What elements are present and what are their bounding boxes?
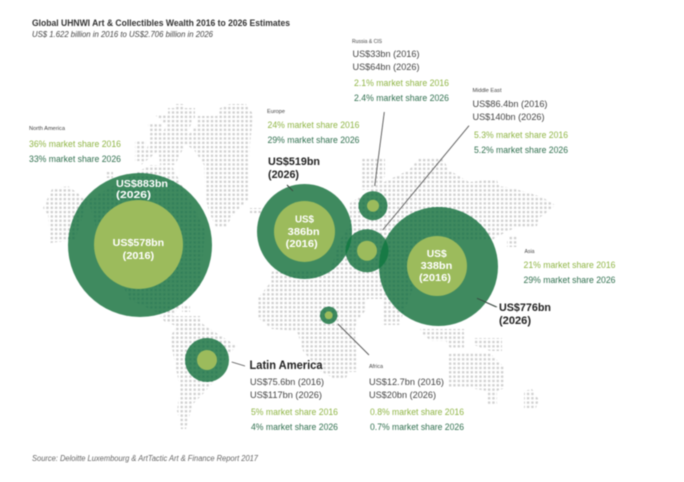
panel: Middle East: Middle East	[472, 88, 502, 94]
panel: Africa: 0.7% market share 2026	[370, 422, 464, 432]
leader lines	[232, 112, 496, 366]
panel: Middle East: US$140bn (2026)	[472, 112, 544, 122]
panel: Latin America: US$117bn (2026)	[250, 390, 322, 400]
panel: Asia: 29% market share 2026	[524, 275, 616, 285]
panel: North America: US$578bn	[113, 237, 164, 249]
panel: Russia and CIS: 2.4% market share 2026	[354, 93, 449, 103]
panel: Africa: Africa	[369, 364, 383, 370]
panel: Asia: (2026)	[499, 315, 531, 327]
panel: North America: 33% market share 2026	[29, 154, 121, 164]
panel: Europe: US$	[295, 214, 314, 226]
leader ticks over circles	[287, 185, 497, 307]
panel: Latin America: US$75.6bn (2016)	[250, 377, 324, 387]
panel: Russia and CIS	[352, 39, 449, 103]
panel: North America: US$883bn	[116, 178, 168, 190]
panel: Russia and CIS: US$64bn (2026)	[352, 62, 420, 72]
panel: Africa: US$20bn (2026)	[369, 390, 436, 400]
panel: Europe: Europe	[267, 109, 285, 115]
panel: North America: North America	[29, 126, 65, 132]
title: Global UHNWI Art & Collectibles Wealth 2016 to 2026 Estimates	[32, 18, 290, 28]
dotted world map	[43, 104, 555, 429]
panel: Europe	[267, 109, 360, 250]
panel: Asia: US$776bn	[499, 302, 551, 314]
panel: Middle East: US$86.4bn (2016)	[472, 99, 548, 109]
outer circles (2026)	[68, 173, 498, 382]
panel: Asia: (2016)	[419, 272, 451, 284]
panel: Middle East	[472, 88, 568, 155]
panel: Africa: 0.8% market share 2016	[370, 407, 464, 417]
panel: Asia: Asia	[524, 249, 535, 255]
panel: Europe: 386bn	[288, 226, 320, 238]
panel: Russia and CIS: Russia & CIS	[352, 39, 383, 45]
panel: Latin America: 4% market share 2026	[251, 422, 338, 432]
panel: Latin America	[250, 358, 338, 432]
subtitle: US$ 1.622 billion in 2016 to US$2.706 billion in 2026	[32, 29, 213, 39]
circle overlaps	[345, 236, 389, 268]
panel: Europe: US$519bn	[268, 156, 320, 168]
panel: Russia and CIS: 2.1% market share 2016	[354, 78, 449, 88]
panel: Europe: 24% market share 2016	[268, 120, 360, 130]
panel: North America: 36% market share 2016	[29, 139, 121, 149]
panel: Latin America: Latin America	[250, 358, 323, 372]
panel: Middle East: 5.3% market share 2016	[474, 130, 568, 140]
panel: North America	[29, 126, 168, 262]
panel: North America: (2026)	[116, 189, 151, 201]
panel: Latin America: 5% market share 2016	[251, 407, 338, 417]
panel: Africa: US$12.7bn (2016)	[369, 377, 444, 387]
panel: North America: (2016)	[123, 250, 154, 262]
panel: Africa	[369, 364, 464, 432]
panel: Asia	[419, 248, 616, 327]
panel: Europe: (2026)	[268, 169, 299, 181]
panel: Asia: 21% market share 2016	[524, 260, 616, 270]
panel: Europe: (2016)	[286, 238, 318, 250]
inner circles (2016)	[94, 200, 467, 370]
panel: Russia and CIS: US$33bn (2016)	[352, 49, 420, 59]
panel: Asia: 338bn	[421, 260, 452, 272]
map dots through circles	[68, 172, 490, 382]
panel: Europe: 29% market share 2026	[268, 135, 360, 145]
panel: Middle East: 5.2% market share 2026	[474, 145, 568, 155]
panel: Asia: US$	[427, 248, 447, 260]
source note: Source: Deloitte Luxembourg & ArtTactic Art & Finance Report 2017	[32, 454, 259, 463]
